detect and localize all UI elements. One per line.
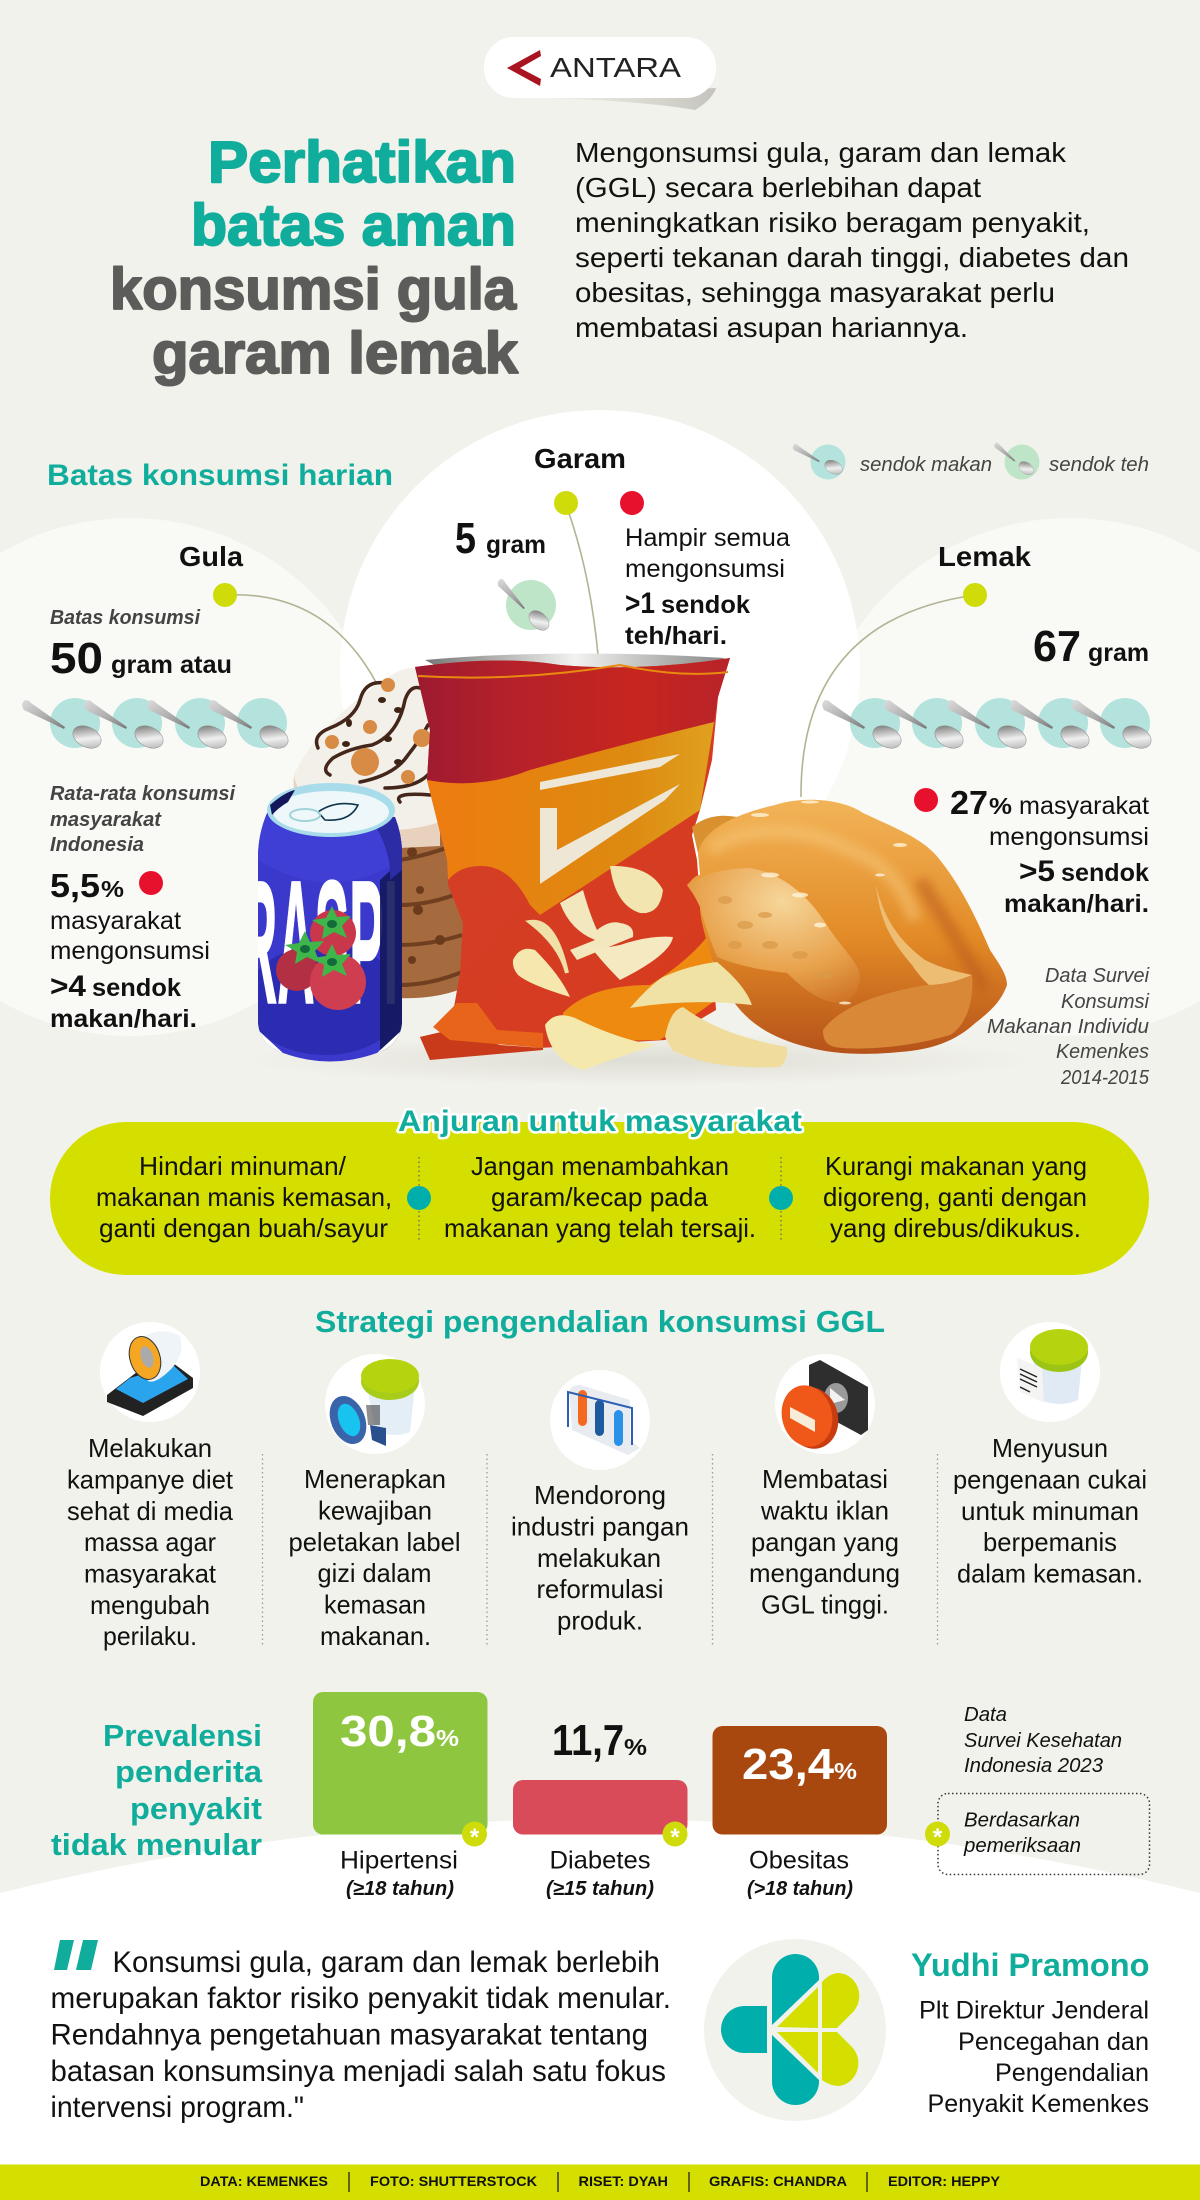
icon: video and stop sign	[775, 1354, 875, 1454]
lemak spoons	[822, 698, 1155, 753]
source note	[987, 965, 1150, 1089]
lemak limit: 67	[1033, 622, 1081, 671]
gula limit: 50	[50, 634, 103, 683]
chicken wing lower	[823, 975, 972, 1049]
strategy 1 text: mengubah	[90, 1590, 210, 1620]
strategy 3 text: melakukan	[537, 1543, 661, 1573]
strategy 1 text	[67, 1433, 234, 1651]
legend: spoons	[793, 442, 1149, 480]
chicken wing upper	[876, 885, 972, 1010]
source note: Konsumsi	[1061, 991, 1150, 1013]
title	[110, 130, 519, 386]
strategy 2 text: kemasan	[324, 1590, 426, 1620]
lemak heading: Lemak	[938, 541, 1031, 572]
panel: garam	[455, 443, 790, 650]
chips in bag	[610, 866, 663, 913]
heading: prevalence	[51, 1718, 263, 1862]
gula marker	[213, 583, 237, 607]
strategy 5 text: untuk minuman	[961, 1496, 1139, 1526]
asterisk markers: *	[470, 1824, 480, 1851]
intro paragraph	[575, 137, 1129, 343]
asterisk markers: *	[670, 1824, 680, 1851]
speaker role	[919, 1996, 1149, 2118]
strategy 4 text	[749, 1464, 900, 1620]
intro paragraph: (GGL) secara berlebihan dapat	[575, 172, 981, 203]
strategy 4 text: GGL tinggi.	[761, 1590, 889, 1620]
footer credits: DATA: KEMENKES	[200, 2173, 328, 2189]
recommendation 3	[823, 1151, 1087, 1243]
strategy 5 text: Menyusun	[992, 1433, 1108, 1463]
bar: obesitas	[712, 1726, 887, 1900]
recommendation 2	[444, 1151, 756, 1243]
strategy 5 text: pengenaan cukai	[953, 1464, 1147, 1494]
garam red marker	[620, 491, 644, 515]
strategy 3 text	[511, 1480, 689, 1636]
strategy 1 text: perilaku.	[103, 1621, 197, 1651]
heading: recommendations: Anjuran untuk masyarakat	[398, 1105, 802, 1138]
bar: diabetes: 11,7	[552, 1716, 624, 1765]
source note: 2014-2015	[1060, 1067, 1150, 1089]
bar: diabetes: (≥15 tahun)	[546, 1878, 654, 1900]
speaker role: Pencegahan dan	[958, 2028, 1149, 2056]
strategy 2 text: peletakan label	[288, 1527, 460, 1557]
strategy 1 text: massa agar	[84, 1527, 216, 1557]
strategy 4 text: Membatasi	[762, 1464, 888, 1494]
strategy 3 text: Mendorong	[534, 1480, 666, 1510]
heading: strategy: Strategi pengendalian konsumsi GGL	[315, 1304, 885, 1339]
bag mouth	[425, 653, 725, 668]
chicken breast	[687, 868, 860, 1003]
garam limit	[455, 514, 546, 563]
panel: recommendations	[50, 1105, 1149, 1275]
recommendation 3: digoreng, ganti dengan	[823, 1182, 1087, 1212]
footer credits: RISET: DYAH	[578, 2173, 668, 2189]
heading: daily limits: Batas konsumsi harian	[47, 459, 393, 492]
speaker role: Pengendalian	[995, 2059, 1149, 2087]
strategy 5 text: dalam kemasan.	[957, 1558, 1143, 1588]
intro paragraph: seperti tekanan darah tinggi, diabetes dan	[575, 242, 1129, 273]
bar: hipertensi: (≥18 tahun)	[346, 1878, 454, 1900]
lemak marker	[963, 583, 987, 607]
source note: Makanan Individu	[987, 1016, 1149, 1038]
bar: hipertensi: 30,8	[340, 1707, 436, 1756]
gula average: masyarakat	[50, 907, 181, 935]
bar: hipertensi	[313, 1692, 488, 1900]
panel: gula	[22, 541, 292, 1033]
bar: obesitas: Obesitas	[749, 1846, 849, 1874]
logo: ANTARA badge: ANTARA	[550, 52, 681, 83]
legend: spoons: sendok makan	[860, 454, 992, 476]
footer credits: FOTO: SHUTTERSTOCK	[370, 2173, 537, 2189]
lemak statistic: sendok	[1061, 859, 1149, 887]
recommendation pill	[50, 1122, 1149, 1275]
bar: hipertensi: Hipertensi	[340, 1846, 458, 1874]
bar: obesitas: %	[834, 1758, 857, 1784]
logo: Kemenkes	[704, 1939, 886, 2121]
text: RASPI	[240, 845, 398, 1041]
strategy 4 text: mengandung	[749, 1558, 900, 1588]
quote text	[50, 1946, 671, 2124]
footer credits	[0, 2164, 1200, 2200]
illustration: loose chips	[545, 962, 787, 1070]
icon: quotation mark	[54, 1940, 98, 1970]
gula average: Indonesia	[50, 834, 144, 856]
recommendation 1: Hindari minuman/	[139, 1151, 347, 1181]
bag top red	[415, 658, 730, 783]
strategy 1 text: kampanye diet	[67, 1464, 234, 1494]
quote text: batasan konsumsinya menjadi salah satu fokus	[50, 2055, 666, 2088]
lemak statistic: makan/hari.	[1004, 890, 1149, 918]
icon: jar and document	[1000, 1322, 1100, 1422]
footer credits: EDITOR: HEPPY	[888, 2173, 1001, 2189]
intro paragraph: meningkatkan risiko beragam penyakit,	[575, 207, 1090, 238]
asterisk markers	[462, 1822, 688, 1851]
lemak statistic: 27	[950, 784, 988, 821]
bar: hipertensi: %	[436, 1725, 459, 1751]
strategy 2 text: gizi dalam	[318, 1558, 432, 1588]
source note: Kemenkes	[1056, 1041, 1149, 1063]
strategy 2 text: kewajiban	[318, 1496, 432, 1526]
bag stripes	[540, 754, 680, 790]
strategy 5: excise	[953, 1322, 1147, 1588]
speaker role: Plt Direktur Jenderal	[919, 1996, 1149, 2024]
intro paragraph: membatasi asupan hariannya.	[575, 312, 968, 343]
bar: obesitas: 23,4	[742, 1740, 835, 1789]
intro paragraph: Mengonsumsi gula, garam dan lemak	[575, 137, 1067, 168]
title: batas aman	[191, 193, 516, 258]
strategy 3 text: produk.	[557, 1606, 643, 1636]
lemak statistic: mengonsumsi	[989, 823, 1149, 851]
gula average: mengonsumsi	[50, 937, 210, 965]
garam marker	[554, 491, 578, 515]
garam statistic	[625, 524, 790, 650]
garam statistic: sendok	[661, 591, 750, 619]
lemak limit: gram	[1088, 639, 1149, 667]
bar: obesitas: (>18 tahun)	[747, 1878, 853, 1900]
illustration: dessert cup	[294, 668, 470, 998]
source note: health survey: Indonesia 2023	[964, 1755, 1103, 1777]
garam limit: 5	[455, 514, 476, 563]
strategy 4: ad limits	[749, 1354, 900, 1620]
heading: prevalence: Prevalensi	[103, 1718, 262, 1753]
strategy 5 text	[953, 1433, 1147, 1588]
gula average: >4	[50, 970, 86, 1003]
gula average: %	[101, 876, 124, 902]
lemak statistic	[914, 784, 1149, 918]
strategy dividers	[262, 1454, 938, 1646]
chart: prevalence bars	[313, 1692, 887, 1900]
heading: prevalence: penderita	[115, 1754, 263, 1789]
speaker role: Penyakit Kemenkes	[928, 2090, 1149, 2118]
connector lines	[225, 505, 975, 797]
food shadow	[240, 1034, 1040, 1086]
gula average: masyarakat	[50, 809, 162, 831]
illustration: soda can	[258, 783, 402, 1062]
recommendation 2: garam/kecap pada	[491, 1182, 709, 1212]
recommendation 2: makanan yang telah tersaji.	[444, 1213, 756, 1243]
garam statistic: Hampir semua	[625, 524, 790, 552]
recommendation 3: Kurangi makanan yang	[825, 1151, 1087, 1181]
strategy 1 text: sehat di media	[67, 1496, 234, 1526]
gula average: 5,5	[50, 867, 100, 904]
strategy 3 text: industri pangan	[511, 1512, 689, 1542]
callout: asterisk note: pemeriksaan	[963, 1835, 1081, 1857]
source note: health survey: Survei Kesehatan	[964, 1730, 1122, 1752]
bar: diabetes: %	[624, 1734, 647, 1760]
source note: health survey	[964, 1704, 1122, 1777]
strategy 4 text: pangan yang	[751, 1527, 899, 1557]
bag orange band	[427, 722, 714, 915]
garam statistic: teh/hari.	[625, 622, 727, 650]
illustration: roast chicken	[687, 800, 1007, 1054]
gula average	[50, 783, 235, 1033]
lemak statistic: >5	[1019, 855, 1055, 888]
strategy 2 text: Menerapkan	[304, 1464, 446, 1494]
bag body	[415, 658, 730, 1060]
garam heading: Garam	[534, 443, 626, 474]
strategy 2: nutrition label	[288, 1354, 460, 1651]
strategy 3: reformulation	[511, 1370, 689, 1636]
footer credits: GRAFIS: CHANDRA	[709, 2173, 847, 2189]
gula heading: Gula	[179, 541, 243, 572]
bag lower orange	[560, 933, 716, 1042]
quote text: intervensi program."	[50, 2091, 304, 2124]
teal divider dots	[407, 1186, 793, 1210]
gula limit: Batas konsumsi	[50, 607, 200, 629]
legend: spoons: sendok teh	[1049, 454, 1149, 476]
source note: Data Survei	[1045, 965, 1150, 987]
speaker name: Yudhi Pramono	[911, 1947, 1150, 1983]
strategy 1 text: Melakukan	[88, 1433, 212, 1463]
illustration: chip bag	[415, 653, 730, 1060]
callout: asterisk note: *	[933, 1824, 943, 1851]
strategy 5 text: berpemanis	[983, 1527, 1117, 1557]
bar: diabetes	[513, 1716, 688, 1900]
quote text: Rendahnya pengetahuan masyarakat tentang	[50, 2018, 648, 2052]
panel: lemak	[822, 541, 1155, 1089]
garam statistic: mengonsumsi	[625, 555, 785, 583]
recommendation 3: yang direbus/dikukus.	[830, 1213, 1081, 1243]
title: Perhatikan	[208, 130, 516, 195]
strategy 3 text: reformulasi	[536, 1574, 664, 1604]
gula limit: gram atau	[111, 651, 232, 679]
title: garam lemak	[152, 321, 519, 386]
bar: diabetes: Diabetes	[550, 1846, 650, 1874]
icon: jar and magnifier	[323, 1354, 425, 1454]
gula average: sendok	[92, 974, 181, 1002]
icon: phone and speaker	[100, 1322, 200, 1422]
lemak statistic: masyarakat	[1019, 792, 1149, 820]
callout: asterisk note	[925, 1794, 1150, 1874]
icon: test tubes	[550, 1370, 650, 1470]
garam limit: gram	[486, 531, 546, 559]
strategy 2 text	[288, 1464, 460, 1651]
bottom white curve	[0, 1819, 1200, 2200]
gula limit	[50, 607, 232, 683]
logo: ANTARA badge	[484, 37, 716, 110]
recommendation 1	[96, 1151, 392, 1243]
recommendation 1: makanan manis kemasan,	[96, 1182, 392, 1212]
heading: prevalence: tidak menular	[51, 1827, 262, 1862]
lemak statistic: %	[989, 793, 1012, 819]
quote text: merupakan faktor risiko penyakit tidak menular.	[50, 1982, 671, 2015]
strategy 1 text: masyarakat	[84, 1558, 217, 1588]
recommendation 1: ganti dengan buah/sayur	[99, 1213, 388, 1243]
gula average: makan/hari.	[50, 1005, 197, 1033]
source note: health survey: Data	[964, 1704, 1007, 1726]
berries	[276, 906, 366, 1010]
recommendation 2: Jangan menambahkan	[471, 1151, 729, 1181]
garam statistic: >1	[625, 587, 655, 620]
intro paragraph: obesitas, sehingga masyarakat perlu	[575, 277, 1055, 308]
heading: prevalence: penyakit	[130, 1791, 262, 1826]
strategy 2 text: makanan.	[320, 1621, 431, 1651]
title: konsumsi gula	[110, 257, 517, 322]
lemak limit	[1033, 622, 1149, 671]
garam spoon	[487, 578, 561, 636]
strategy 4 text: waktu iklan	[760, 1496, 889, 1526]
gula spoons	[22, 698, 292, 753]
gula average: Rata-rata konsumsi	[50, 783, 235, 805]
callout: asterisk note: Berdasarkan	[964, 1810, 1080, 1832]
strategy 1: media campaign	[67, 1322, 234, 1651]
panel: circle backdrops for daily limits	[0, 410, 1200, 1036]
quote text: Konsumsi gula, garam dan lemak berlebih	[112, 1946, 660, 1979]
